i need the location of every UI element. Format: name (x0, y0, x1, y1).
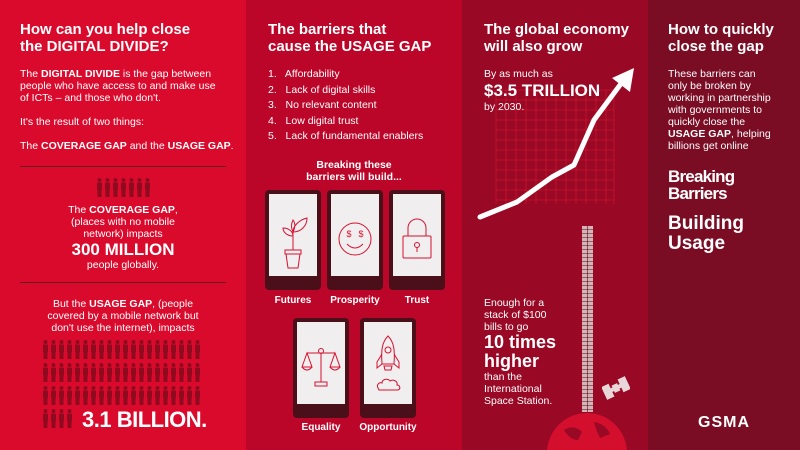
body text: only be broken by (668, 80, 751, 92)
body text: billions get online (668, 140, 749, 152)
phone: futures (265, 190, 321, 290)
slogan: breaking barriers: Barriers (668, 184, 727, 203)
stack text: 10 times (484, 332, 556, 352)
coverage gap text: people globally. (87, 259, 159, 271)
usage gap text: covered by a mobile network but (47, 310, 199, 322)
barrier list: 2. Lack of digital skills (268, 84, 375, 96)
body text: These barriers can (668, 68, 756, 80)
heading: How to quickly (668, 21, 774, 38)
stack text: higher (484, 351, 539, 371)
stack text: Space Station. (484, 395, 552, 407)
coverage gap text: network) impacts (83, 228, 163, 240)
barrier list: 5. Lack of fundamental enablers (268, 130, 423, 142)
trillion stat (484, 68, 600, 113)
label: opportunity: Opportunity (359, 422, 417, 433)
icon: usage gap people grid (43, 340, 200, 428)
intro text: The COVERAGE GAP and the USAGE GAP. (20, 140, 234, 152)
heading: The barriers that (268, 21, 386, 38)
label: futures: Futures (275, 295, 311, 306)
body text (668, 68, 771, 152)
panel: global economy (462, 0, 648, 450)
coverage gap text (68, 204, 178, 271)
panel: digital divide (0, 0, 246, 450)
heading (268, 21, 431, 55)
intro text: people who have access to and make use (20, 80, 216, 92)
icon: space station (602, 376, 630, 400)
slogan: breaking barriers (668, 167, 734, 203)
stack text: than the (484, 371, 522, 383)
trillion stat: by 2030. (484, 101, 524, 113)
stack text: bills to go (484, 321, 528, 333)
phone: equality (293, 318, 349, 418)
heading (668, 21, 774, 55)
stack text (484, 297, 556, 407)
heading: The global economy (484, 21, 629, 38)
label: prosperity: Prosperity (330, 295, 380, 306)
slogan: building usage: Usage (668, 233, 725, 254)
stack text: International (484, 383, 542, 395)
slogan: breaking barriers: Breaking (668, 167, 734, 186)
barrier list: 1. Affordability (268, 68, 340, 80)
intro text: It's the result of two things: (20, 116, 144, 128)
slogan: building usage (668, 213, 744, 254)
panel: usage gap barriers (246, 0, 462, 450)
barrier list (268, 68, 423, 142)
heading (20, 21, 190, 55)
coverage gap text: The COVERAGE GAP, (68, 204, 178, 216)
subheading: barriers will build... (306, 171, 402, 183)
intro text (20, 68, 234, 152)
usage gap text: don't use the internet), impacts (51, 322, 195, 334)
icon: coverage gap people (97, 178, 150, 197)
stack text: Enough for a (484, 297, 544, 309)
body text: quickly close the (668, 116, 745, 128)
heading: close the gap (668, 38, 764, 55)
subheading: Breaking these (316, 159, 392, 171)
stack text: stack of $100 (484, 309, 546, 321)
phone: prosperity: $ (358, 229, 364, 239)
arrow: growth line (480, 68, 634, 217)
label: trust: Trust (405, 295, 429, 306)
3.1 billion: 3.1 BILLION. (82, 407, 207, 432)
usage gap text (47, 298, 199, 334)
subheading (306, 159, 402, 183)
money stack (582, 226, 593, 412)
logo: GSMA: GSMA (698, 414, 750, 431)
intro text: of ICTs – and those who don't. (20, 92, 161, 104)
trillion stat: By as much as (484, 68, 553, 80)
heading: cause the USAGE GAP (268, 38, 431, 55)
phone: prosperity (327, 190, 383, 290)
phone: trust (389, 190, 445, 290)
body text: with governments to (668, 104, 762, 116)
slogan: building usage: Building (668, 213, 744, 234)
label: equality: Equality (302, 422, 340, 433)
panel: close the gap (648, 0, 800, 450)
barrier list: 3. No relevant content (268, 99, 377, 111)
heading: How can you help close (20, 21, 190, 38)
usage gap text: But the USAGE GAP, (people (53, 298, 193, 310)
coverage gap text: 300 MILLION (72, 240, 174, 259)
intro text: The DIGITAL DIVIDE is the gap between (20, 68, 211, 80)
heading: will also grow (484, 38, 582, 55)
heading (484, 21, 629, 55)
body text: working in partnership (668, 92, 771, 104)
grid chart (478, 68, 634, 220)
coverage gap text: (places with no mobile (71, 216, 175, 228)
body text: USAGE GAP, helping (668, 128, 771, 140)
icon: globe (547, 413, 627, 450)
phone: prosperity: $ (346, 229, 352, 239)
barrier list: 4. Low digital trust (268, 114, 358, 126)
trillion stat: $3.5 TRILLION (484, 81, 600, 100)
heading: the DIGITAL DIVIDE? (20, 38, 169, 55)
phone: opportunity (360, 318, 416, 418)
